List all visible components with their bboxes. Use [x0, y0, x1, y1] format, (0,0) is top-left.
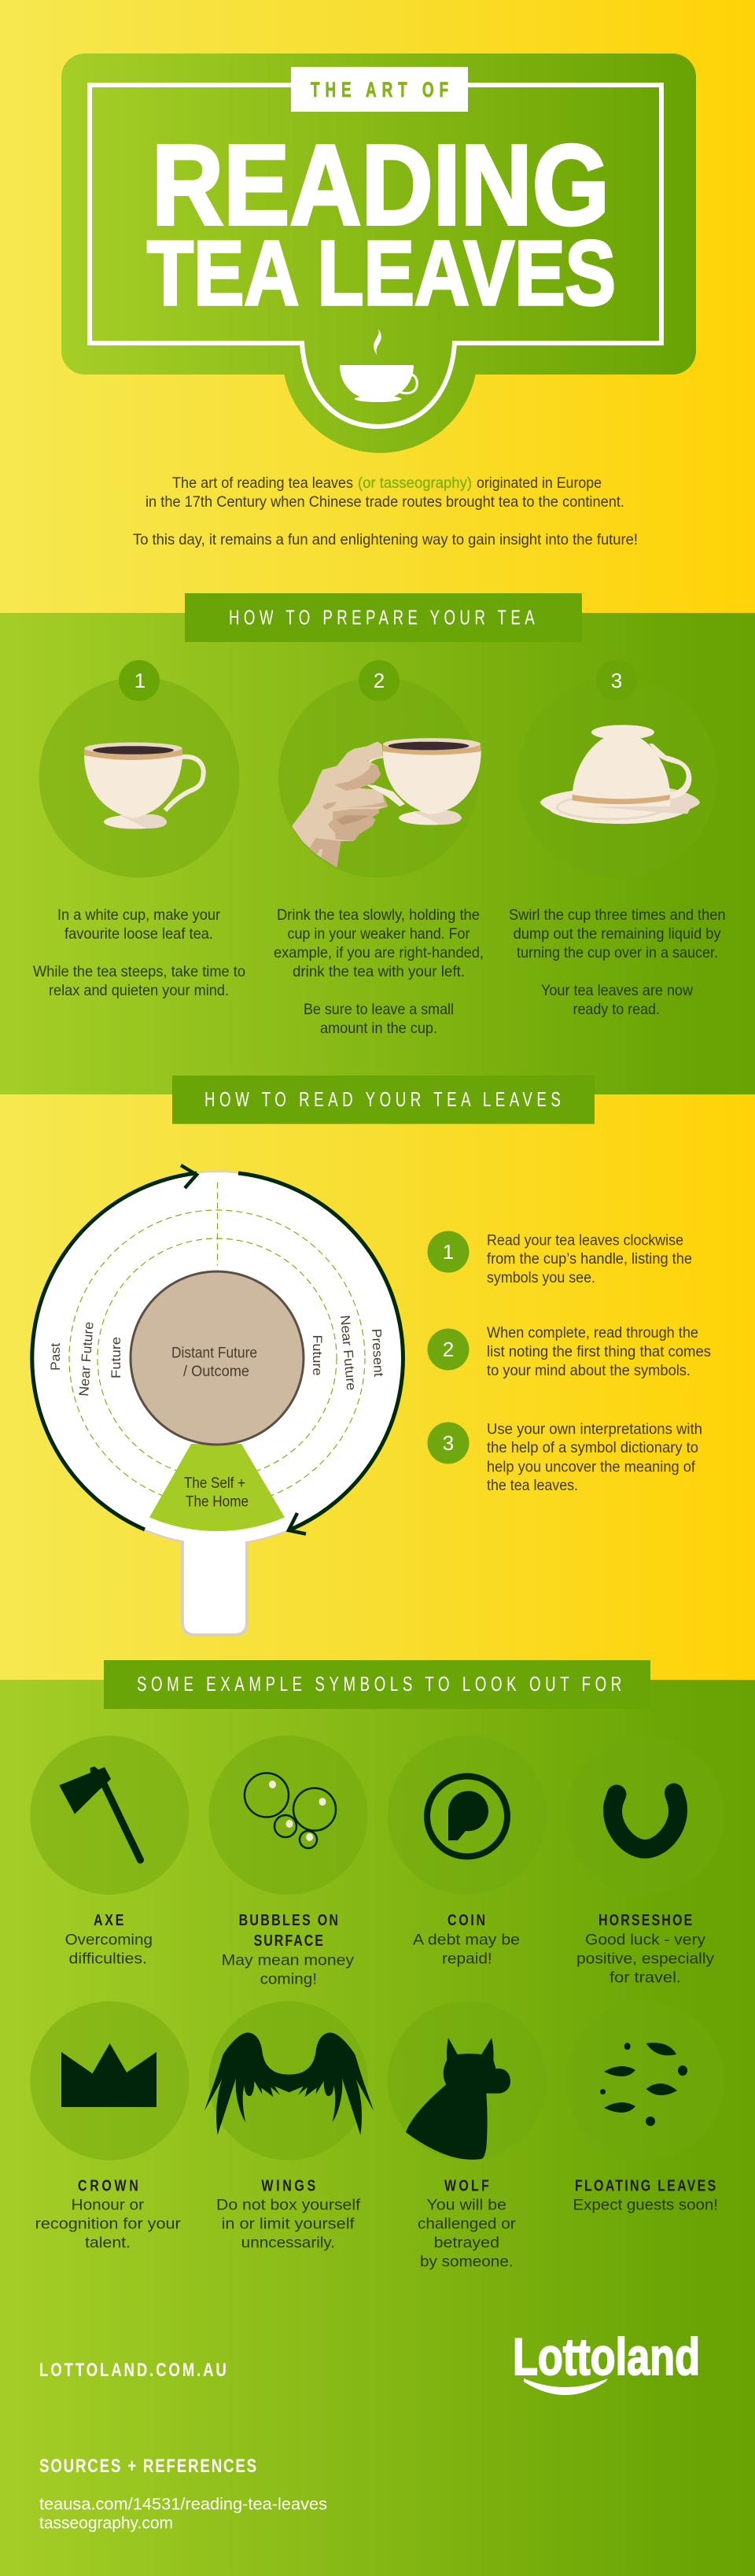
label: horseshoe: Good luck - very	[585, 1932, 705, 1949]
label: floating leaves: Expect guests soon!	[573, 2197, 718, 2214]
label: the art of	[291, 67, 468, 112]
heading: how to prepare your tea	[185, 593, 582, 642]
title: reading: READING	[152, 121, 610, 249]
sources: teausa.com/14531/reading-tea-leaves	[39, 2496, 327, 2514]
diagram: cup from above	[31, 1165, 403, 1635]
step 3 text: dump out the remaining liquid by	[514, 925, 721, 943]
intro text: The art of reading tea leaves	[172, 474, 353, 492]
label: bubbles: May mean money	[222, 1952, 354, 1969]
step 3 backdrop	[517, 677, 717, 878]
panel: prepare background	[0, 613, 755, 1094]
label: crown: Honour or	[72, 2197, 145, 2214]
step 1 text: In a white cup, make your	[57, 906, 220, 924]
symbol: axe	[30, 1736, 189, 1968]
heading: how to read your tea leaves: HOW TO READ YOUR TEA LEAVES	[204, 1087, 561, 1111]
label: axe: AXE	[94, 1911, 123, 1928]
heading: some example symbols	[104, 1660, 650, 1709]
icon: wings	[204, 2032, 374, 2135]
label: wings: WINGS	[261, 2177, 315, 2194]
ring labels: Future	[109, 1337, 123, 1378]
step 2	[274, 660, 484, 1037]
title banner	[61, 54, 696, 453]
ring labels: Near Future	[337, 1315, 359, 1391]
step 1 text: favourite loose leaf tea.	[64, 925, 213, 943]
sources	[39, 2456, 327, 2533]
label: horseshoe: HORSESHOE	[598, 1911, 692, 1928]
step 1 badge: 1	[134, 669, 145, 692]
heading: how to prepare your tea: HOW TO PREPARE YOUR TEA	[229, 605, 536, 629]
banner frame	[90, 85, 661, 426]
instruction 1: symbols you see.	[487, 1269, 595, 1286]
panel: symbols background	[0, 1680, 755, 2576]
icon: bubbles	[245, 1773, 336, 1848]
step 2 text: cup in your weaker hand. For	[288, 925, 470, 943]
label: wings: Do not box yourself	[216, 2197, 361, 2214]
instruction 2: to your mind about the symbols.	[487, 1362, 691, 1379]
symbol: crown	[30, 2002, 189, 2252]
label: bubbles: BUBBLES ON	[239, 1911, 338, 1928]
step 3 text	[509, 906, 725, 1018]
ring labels: Past	[48, 1343, 63, 1371]
instruction 2: list noting the first thing that comes	[487, 1343, 711, 1360]
step 2 badge	[359, 660, 400, 701]
sector: the self and the home	[149, 1444, 285, 1531]
label: wolf	[418, 2177, 516, 2271]
sector: the self and the home: The Self +	[184, 1475, 245, 1492]
instruction 3: the tea leaves.	[487, 1477, 578, 1494]
instruction 3	[428, 1421, 702, 1494]
ring labels: Near Future	[76, 1321, 97, 1397]
intro text: originated in Europe	[477, 474, 602, 492]
cup bowl	[31, 1172, 403, 1544]
step 2 badge: 2	[374, 669, 385, 692]
label: wings: unncessarily.	[241, 2235, 335, 2252]
label: the art of: THE ART OF	[311, 78, 448, 101]
icon: horseshoe	[603, 1783, 687, 1858]
label: horseshoe	[576, 1911, 714, 1987]
step 2 text	[274, 906, 484, 1037]
label: horseshoe: for travel.	[610, 1969, 681, 1987]
step 2 text: Be sure to leave a small	[304, 1001, 454, 1018]
ring labels: Future	[310, 1334, 325, 1375]
ring labels: Present	[369, 1328, 386, 1377]
step 1 badge	[119, 660, 160, 701]
icon: coin	[427, 1777, 507, 1857]
label: crown: talent.	[85, 2235, 131, 2252]
label: axe	[65, 1911, 153, 1968]
heading: how to read your tea leaves	[172, 1076, 595, 1124]
label: wolf: WOLF	[444, 2177, 489, 2194]
arrow: left arc	[32, 1165, 197, 1530]
instruction 3: Use your own interpretations with	[487, 1421, 702, 1438]
instruction 1: 1	[443, 1240, 454, 1264]
instruction 2	[428, 1324, 711, 1379]
label: bubbles	[222, 1911, 354, 1988]
step 1 backdrop	[39, 677, 239, 878]
step 2 text: example, if you are right-handed,	[274, 944, 484, 961]
label: crown	[35, 2177, 181, 2252]
symbol: horseshoe	[565, 1736, 724, 1987]
icon: wolf	[406, 2038, 510, 2160]
banner shape	[61, 54, 696, 453]
sources: SOURCES + REFERENCES	[39, 2456, 256, 2477]
symbol: coin	[388, 1736, 547, 1968]
cup handle	[145, 1530, 289, 1635]
label: wolf: by someone.	[420, 2253, 514, 2271]
step 3 text: Your tea leaves are now	[541, 982, 694, 999]
intro text: To this day, it remains a fun and enlightening way to gain insight into the future!	[133, 531, 638, 548]
intro text: (or tasseography)	[358, 474, 472, 492]
step 2 text: drink the tea with your left.	[293, 963, 465, 980]
step 1	[33, 660, 245, 999]
instruction 3: 3	[443, 1431, 454, 1455]
label: coin: repaid!	[442, 1950, 492, 1968]
step 3 badge	[596, 660, 637, 701]
label: horseshoe: positive, especially	[576, 1950, 714, 1968]
label: wolf: betrayed	[434, 2235, 499, 2252]
sector: the self and the home: The Home	[186, 1494, 249, 1511]
icon: cup of tea	[84, 743, 204, 829]
icon: upturned cup on saucer	[540, 725, 700, 824]
centre: distant future: Distant Future	[171, 1345, 257, 1362]
icon: crown	[61, 2043, 157, 2107]
label: coin	[413, 1911, 520, 1968]
step 3 text: Swirl the cup three times and then	[509, 906, 725, 924]
ring labels	[48, 1315, 386, 1397]
step 2 text: amount in the cup.	[320, 1020, 437, 1037]
panel: read background	[0, 1094, 755, 1680]
symbol: bubbles on surface	[209, 1736, 368, 1988]
symbol: wolf	[388, 2002, 547, 2271]
instruction 1	[428, 1231, 692, 1286]
dashed rings	[69, 1182, 365, 1506]
label: floating leaves	[573, 2177, 718, 2214]
centre: distant future: / Outcome	[183, 1364, 249, 1380]
step 3	[509, 660, 725, 1018]
label: bubbles: SURFACE	[254, 1932, 323, 1949]
instruction 3: help you uncover the meaning of	[487, 1459, 696, 1476]
icon: axe	[59, 1766, 140, 1860]
label: crown: CROWN	[78, 2177, 138, 2194]
symbol: floating leaves	[565, 2002, 724, 2214]
intro text: in the 17th Century when Chinese trade routes brought tea to the continent.	[145, 493, 624, 511]
instruction 2: When complete, read through the	[487, 1324, 698, 1342]
instruction 1: Read your tea leaves clockwise	[487, 1232, 683, 1249]
instruction 3: the help of a symbol dictionary to	[487, 1439, 698, 1456]
label: crown: recognition for your	[35, 2216, 181, 2233]
step 2 backdrop	[278, 677, 479, 878]
step 3 text: ready to read.	[573, 1001, 660, 1018]
arrow: right arc	[238, 1173, 403, 1534]
label: axe: difficulties.	[69, 1950, 147, 1968]
step 1 text: While the tea steeps, take time to	[33, 963, 245, 980]
step 2 text: Drink the tea slowly, holding the	[277, 906, 480, 924]
footer url: LOTTOLAND.COM.AU	[39, 2360, 226, 2381]
label: wolf: challenged or	[418, 2216, 516, 2233]
icon: hand holding cup	[292, 738, 481, 868]
label: bubbles: coming!	[260, 1971, 317, 1988]
logo: lottoland: Lottoland	[513, 2327, 700, 2386]
label: floating leaves: FLOATING LEAVES	[575, 2177, 716, 2194]
centre: distant future	[131, 1271, 304, 1445]
label: wings	[216, 2177, 361, 2252]
instruction 1: from the cup’s handle, listing the	[487, 1250, 692, 1268]
title: tea leaves: TEA LEAVES	[147, 222, 616, 324]
label: coin: A debt may be	[413, 1932, 520, 1949]
intro text	[133, 474, 638, 548]
heading: some example symbols: SOME EXAMPLE SYMBOLS TO LOOK OUT FOR	[137, 1672, 621, 1696]
panel: intro background	[0, 0, 755, 614]
label: axe: Overcoming	[65, 1932, 153, 1949]
icon: floating leaves	[600, 2043, 687, 2126]
step 3 badge: 3	[611, 669, 622, 692]
label: wolf: You will be	[426, 2197, 506, 2214]
symbol: wings	[204, 2002, 374, 2252]
step 1 text	[33, 906, 245, 999]
instruction 2: 2	[443, 1338, 454, 1361]
label: wings: in or limit yourself	[222, 2216, 355, 2233]
icon: steaming cup	[340, 329, 417, 402]
sources: tasseography.com	[39, 2515, 173, 2533]
step 3 text: turning the cup over in a saucer.	[517, 944, 718, 961]
instructions list	[428, 1231, 711, 1494]
step 1 text: relax and quieten your mind.	[49, 982, 229, 999]
label: coin: COIN	[447, 1911, 485, 1928]
